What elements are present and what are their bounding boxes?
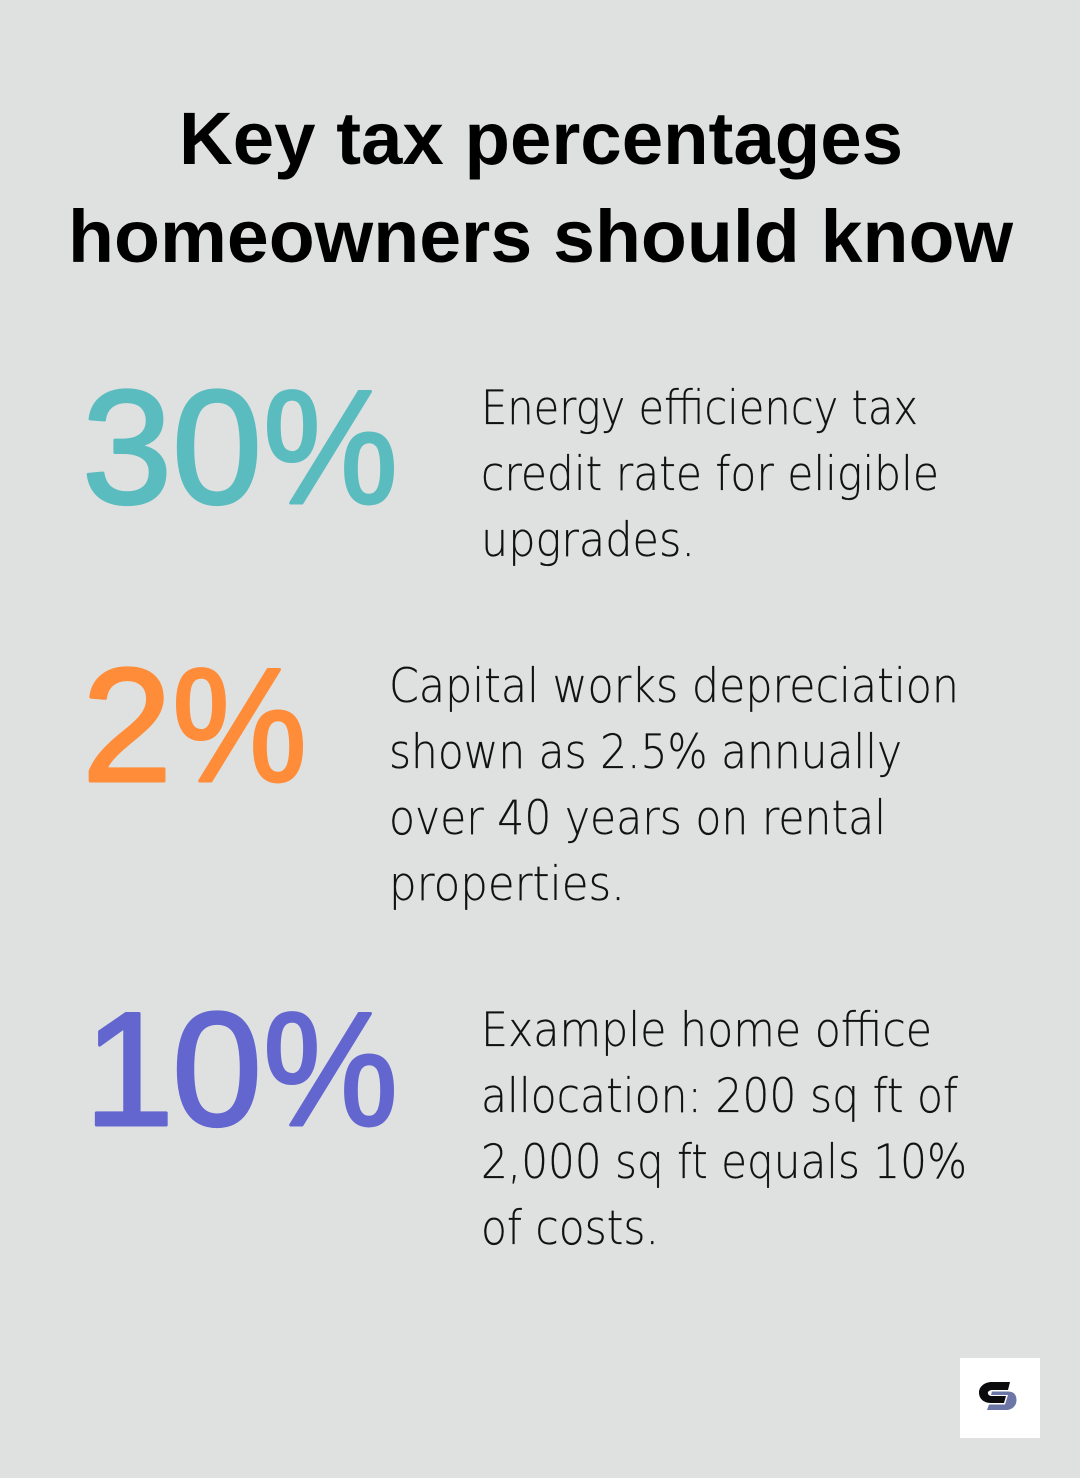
text: capital works depreciation: shown as 2.5% annually [389,725,902,780]
number: 10%: 1 [84,979,174,1160]
text: capital works depreciation: over 40 years on rental [389,791,886,846]
number: 10%: 0 [172,979,262,1160]
stat: 30% [82,357,939,568]
number: 30% [82,357,398,538]
title: homeowners should know [68,195,1013,278]
number: 30%: 0 [172,357,262,538]
title: Key tax percentages [179,97,903,180]
text: capital works depreciation: properties. [389,857,625,912]
stat: 2% [82,635,959,912]
number: 30%: 3 [82,357,172,538]
text: capital works depreciation: Capital works depreciation [389,659,959,714]
text: home office allocation: allocation: 200 sq ft of [481,1069,958,1124]
text: home office allocation: 2,000 sq ft equals 10% [481,1135,967,1190]
text: energy efficiency credit: credit rate for eligible [481,447,939,502]
text: home office allocation: Example home office [481,1003,932,1058]
number: 30%: % [263,357,398,538]
text: energy efficiency credit: Energy efficiency tax [481,381,918,436]
text: home office allocation [481,1003,967,1256]
number: 2%: 2 [82,635,172,816]
number: 10%: % [263,979,398,1160]
number: 10% [84,979,398,1160]
stat: 10% [84,979,967,1256]
title [68,97,1013,278]
text: capital works depreciation [389,659,959,912]
number: 2%: % [172,635,307,816]
text: home office allocation: of costs. [481,1201,659,1256]
number: 2% [82,635,307,816]
text: energy efficiency credit: upgrades. [481,513,695,568]
text: energy efficiency credit [481,381,939,568]
logo badge [960,1358,1040,1438]
